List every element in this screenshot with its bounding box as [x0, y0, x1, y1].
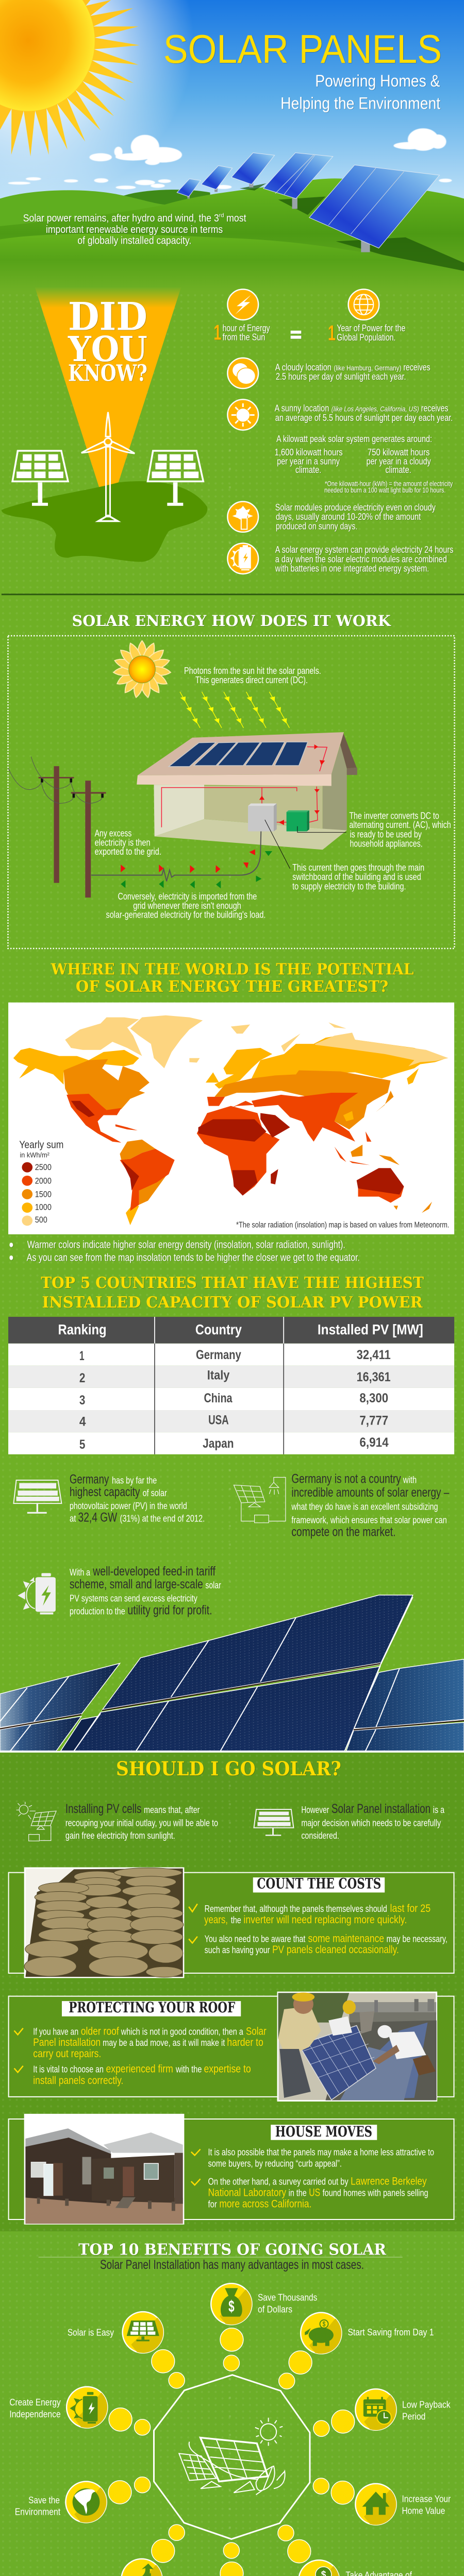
- icon: sun panel battery: [16, 1802, 56, 1841]
- table: installed pv: China: [204, 1391, 233, 1405]
- checklist: roof: Solar: [246, 2025, 267, 2037]
- checklist: house moves: [191, 2147, 434, 2210]
- heading: should I go solar: SHOULD I GO SOLAR?: [116, 1757, 341, 1780]
- icon: panel: [13, 1480, 61, 1514]
- connector dots: [108, 2328, 355, 2576]
- checklist: costs: the: [231, 1914, 241, 1925]
- house illustration: [137, 732, 357, 850]
- text: germany capacity: photovoltaic power (PV) in the world: [70, 1500, 187, 1511]
- checklist: costs: such as having your: [205, 1944, 270, 1955]
- legend: yearly sum: 1500: [35, 1190, 52, 1199]
- panel: world potential: [8, 960, 454, 1263]
- text: installing pv cells: Installing PV cells: [65, 1802, 141, 1816]
- solar panels on hills: [177, 153, 439, 252]
- clouds: [8, 128, 452, 189]
- intro text: [23, 212, 246, 247]
- text: feed-in tariff: scheme, small and large-scale: [70, 1577, 203, 1591]
- legend: yearly sum: 2500: [35, 1163, 52, 1172]
- benefit: save thousands: [211, 2283, 317, 2325]
- label: inverter: [349, 810, 451, 849]
- benefit: save the environment: [15, 2481, 107, 2522]
- fact: cloudy location: [227, 358, 430, 388]
- stat: one hour equals one year: 1: [328, 321, 336, 345]
- legend: yearly sum: 1000: [35, 1202, 52, 1212]
- icon: globe: [349, 289, 379, 320]
- solar array image: [0, 1595, 464, 1753]
- text: feed-in tariff: production to the: [70, 1606, 125, 1617]
- intro text: Solar power remains, after hydro and wind, the 3: [23, 212, 219, 224]
- benefit: energy independence: [9, 2387, 107, 2428]
- table: installed pv: 7,777: [359, 1414, 388, 1428]
- benefit: start saving: $: [323, 2320, 326, 2328]
- text: solar panel installation: is a: [433, 1804, 444, 1815]
- text: installing pv cells: gain free electricity from sunlight.: [65, 1830, 175, 1841]
- map bullets: [9, 1239, 360, 1263]
- legend: yearly sum: 500: [35, 1215, 47, 1225]
- fact: batteries: [227, 544, 453, 574]
- text: germany subsidizing: with: [403, 1475, 417, 1485]
- grid cable: [91, 832, 261, 882]
- table: installed pv: 4: [79, 1415, 86, 1429]
- table: installed pv: 16,361: [357, 1370, 391, 1384]
- label: switchboard: [292, 862, 424, 891]
- orange beam: [35, 287, 181, 515]
- heading: did you know: YOU: [68, 329, 147, 369]
- badge: protecting your roof: PROTECTING YOUR ROOF: [69, 1999, 236, 2016]
- table: installed pv: 3: [79, 1393, 85, 1408]
- label: imported electricity: Conversely, electricity is imported from the: [118, 891, 257, 902]
- icon: central solar panels: [179, 2418, 285, 2495]
- checklist: roof: which is not in good condition, then a: [121, 2026, 243, 2037]
- text: feed-in tariff: PV systems can send excess electricity: [70, 1593, 197, 1604]
- checklist: roof: install panels correctly.: [33, 2074, 123, 2087]
- intro text: of globally installed capacity.: [77, 235, 191, 247]
- panel: house moves: [9, 2114, 454, 2224]
- icon: panel and lamp: [234, 1477, 286, 1523]
- photo: coins: [24, 1868, 184, 1977]
- table: installed pv: USA: [208, 1413, 229, 1427]
- fact: cloudy location: (like Hamburg, Germany): [334, 364, 401, 372]
- text: feed-in tariff: [70, 1564, 221, 1617]
- stat: one hour equals one year: Global Population.: [337, 332, 395, 343]
- icon: battery: [18, 1573, 56, 1615]
- checklist: roof: expertise to: [204, 2062, 251, 2075]
- checklist: roof: [14, 2025, 267, 2087]
- benefit: solar is easy: [68, 2312, 163, 2353]
- benefit: start saving: [301, 2313, 434, 2354]
- benefit: solar is easy: Solar is Easy: [68, 2327, 114, 2338]
- table: installed pv: 6,914: [359, 1436, 389, 1450]
- diagram: how solar energy works: [8, 641, 451, 920]
- table: installed pv: 1: [79, 1349, 85, 1363]
- panel: top 10 benefits: [9, 2240, 451, 2576]
- label: photons: This generates direct current (DC).: [195, 674, 308, 685]
- benefit: save the environment: Save the: [28, 2495, 60, 2505]
- table: installed pv: 2: [79, 1371, 85, 1385]
- fact: cloudy location: receives: [403, 362, 430, 372]
- panel: did you know: [2, 287, 464, 630]
- label: photons: [184, 665, 321, 685]
- stat: one hour equals one year: hour of Energy: [223, 323, 270, 333]
- decagon frame: [154, 2375, 310, 2539]
- fact: kilowatt peak: 1,600 kilowatt hours: [275, 447, 343, 457]
- benefit: home value: [355, 2484, 451, 2525]
- checklist: costs: You also need to be aware that: [205, 1934, 306, 1944]
- checklist: house moves: in the: [289, 2188, 307, 2198]
- sun glow: [0, 0, 194, 204]
- checklist: roof: may be a bad move, as it will make it: [103, 2037, 225, 2048]
- benefit: energy independence: Independence: [9, 2409, 61, 2419]
- benefit: save the environment: Environment: [15, 2506, 61, 2517]
- text: installing pv cells: recouping your initial outlay, you will be able to: [65, 1818, 218, 1828]
- heading: did you know: KNOW?: [68, 360, 147, 387]
- checklist: costs: last for 25: [390, 1902, 430, 1914]
- checklist: roof: carry out repairs.: [33, 2047, 101, 2060]
- panel: how it works frame: [8, 636, 455, 948]
- text: feed-in tariff: utility grid for profit.: [127, 1603, 212, 1617]
- legend: yearly sum: Yearly sum: [19, 1139, 63, 1150]
- text: installing pv cells: [65, 1802, 218, 1841]
- panel: top 5 countries: [8, 1274, 454, 1617]
- checklist: roof: with the: [175, 2064, 202, 2074]
- table: installed pv: Ranking: [58, 1322, 107, 1337]
- stat: one hour equals one year: Year of Power for the: [337, 323, 405, 333]
- fact: cloudy days: [227, 501, 436, 532]
- benefit: low payback: Period: [402, 2411, 425, 2422]
- table: installed pv: Italy: [207, 1368, 229, 1382]
- text: solar panel installation: considered.: [301, 1830, 339, 1841]
- checklist: house moves: US: [309, 2186, 320, 2198]
- table: installed pv: Country: [195, 1322, 242, 1337]
- legend: yearly sum: 2000: [35, 1176, 52, 1186]
- panel: should I go solar: [16, 1757, 444, 1841]
- text: germany capacity: (31%) at the end of 2012.: [120, 1513, 205, 1524]
- benefit: save thousands: of Dollars: [258, 2304, 292, 2315]
- checklist: roof: Panel installation: [33, 2036, 101, 2048]
- checklist: house moves: for: [208, 2199, 217, 2210]
- text: germany capacity: has by far the: [112, 1475, 157, 1485]
- fact: kilowatt peak: [275, 433, 453, 494]
- inverter: [287, 810, 309, 832]
- checklist: roof: If you have an: [33, 2026, 78, 2037]
- benefit: take advantage of incentives: [299, 2560, 412, 2576]
- table: installed pv: Japan: [203, 1436, 234, 1451]
- fact: cloudy location: A cloudy location: [275, 362, 332, 372]
- table: installed pv: 32,411: [357, 1348, 391, 1362]
- label: imported electricity: [106, 891, 266, 920]
- text: germany capacity: [70, 1472, 205, 1524]
- arrows: import from grid: [121, 851, 272, 888]
- arrows: export to grid: [121, 849, 255, 873]
- benefit: save thousands: Save Thousands: [258, 2292, 317, 2303]
- checklist: roof: older roof: [81, 2025, 119, 2037]
- fact: sunny location: A sunny location: [275, 403, 329, 414]
- label: photons: Photons from the sun hit the solar panels.: [184, 665, 321, 676]
- checklist: house moves: National Laboratory: [208, 2186, 287, 2198]
- intro text: rd: [219, 212, 224, 218]
- icon: right solar panel: [147, 451, 203, 506]
- badge: house moves: HOUSE MOVES: [275, 2124, 372, 2140]
- panel: protecting your roof: [9, 1992, 454, 2100]
- icon: lightning: [227, 289, 258, 320]
- table: installed pv: 8,300: [359, 1391, 388, 1405]
- panel: count the costs: [9, 1868, 454, 1977]
- checklist: roof: harder to: [227, 2036, 263, 2048]
- label: excess electricity: electricity is then: [95, 837, 151, 848]
- badge: house moves: [271, 2124, 377, 2140]
- subtitle: [280, 71, 440, 113]
- text: germany capacity: at: [70, 1513, 76, 1524]
- intro text: important renewable energy source in terms: [46, 224, 223, 235]
- fact: cloudy days: produced on sunny days.: [276, 520, 357, 531]
- intro text: most: [226, 212, 246, 224]
- table: installed pv: 5: [79, 1437, 85, 1452]
- text: installing pv cells: means that, after: [144, 1804, 200, 1815]
- text: germany capacity: of solar: [143, 1487, 167, 1498]
- text: germany subsidizing: [291, 1472, 449, 1539]
- icon: panel: [254, 1809, 293, 1836]
- table: installed pv: Germany: [196, 1348, 241, 1362]
- checklist: roof: experienced firm: [106, 2062, 173, 2075]
- wiring: [161, 747, 327, 827]
- ground blob: [2, 481, 207, 562]
- icon: left solar panel: [12, 451, 68, 506]
- label: excess electricity: Any excess: [95, 828, 131, 839]
- badge: protecting your roof: [62, 1999, 241, 2016]
- text: germany capacity: Germany: [70, 1472, 109, 1486]
- text: germany capacity: 32,4 GW: [78, 1511, 117, 1524]
- heading: did you know: [68, 294, 147, 387]
- world insolation map: [13, 1015, 449, 1225]
- icon: sun: [0, 0, 140, 157]
- arrows: sun rays: [180, 692, 289, 728]
- leader lines: [265, 820, 346, 869]
- heading: did you know: DID: [68, 294, 147, 340]
- checklist: house moves: some buyers, by reducing “curb appeal”.: [208, 2158, 342, 2169]
- checklist: costs: years,: [204, 1913, 228, 1926]
- text: germany capacity: highest capacity: [70, 1485, 140, 1499]
- icon: diagram sun: [113, 641, 171, 698]
- hero panel: [0, 0, 464, 291]
- heading: potential of solar energy: [51, 960, 413, 995]
- text: solar panel installation: [301, 1802, 444, 1841]
- switchboard: [248, 803, 277, 832]
- checklist: roof: It is vital to choose an: [33, 2064, 104, 2074]
- benefit: guaranteed performance: [22, 2559, 162, 2576]
- hills: [0, 178, 464, 291]
- label: imported electricity: solar-generated electricity for the building's load.: [106, 909, 266, 920]
- table: installed pv: [8, 1317, 454, 1454]
- panel shadows: [240, 183, 464, 271]
- checklist: house moves: more across California.: [219, 2197, 311, 2210]
- benefit: save thousands: $: [228, 2297, 235, 2315]
- checklist: costs: some maintenance: [308, 1932, 384, 1944]
- checklist: costs: [189, 1902, 448, 1956]
- label: excess electricity: [95, 828, 161, 857]
- label: excess electricity: exported to the grid.: [95, 846, 161, 857]
- legend: yearly sum: [19, 1139, 63, 1226]
- text: feed-in tariff: With a: [70, 1567, 90, 1578]
- photo: house on stumps: [25, 2114, 184, 2224]
- photo: installers on a roof: [278, 1992, 437, 2100]
- badge: count the costs: [253, 1876, 385, 1892]
- heading: top 5 countries: [41, 1274, 424, 1311]
- utility poles: [8, 757, 106, 897]
- icon: wind turbine: [81, 412, 135, 521]
- stat: one hour equals one year: from the Sun: [223, 331, 265, 342]
- legend: yearly sum: in kWh/m²: [20, 1151, 49, 1159]
- benefit: energy independence: Create Energy: [9, 2397, 61, 2408]
- fact: kilowatt peak: climate.: [295, 464, 321, 475]
- checklist: house moves: On the other hand, a survey carried out by: [208, 2176, 349, 2187]
- fact: sunny location: [227, 399, 453, 430]
- text: feed-in tariff: solar: [205, 1580, 221, 1590]
- stat: one hour equals one year: 1: [213, 320, 221, 344]
- fact: kilowatt peak: climate.: [385, 464, 411, 475]
- stat: one hour equals one year: [213, 320, 405, 345]
- fact: kilowatt peak: per year in a sunny: [277, 456, 340, 467]
- benefit: low payback: [355, 2389, 451, 2430]
- text: feed-in tariff: well-developed feed-in tariff: [93, 1564, 216, 1579]
- text: solar panel installation: However: [301, 1804, 329, 1815]
- label: imported electricity: grid whenever there isn't enough: [133, 900, 241, 911]
